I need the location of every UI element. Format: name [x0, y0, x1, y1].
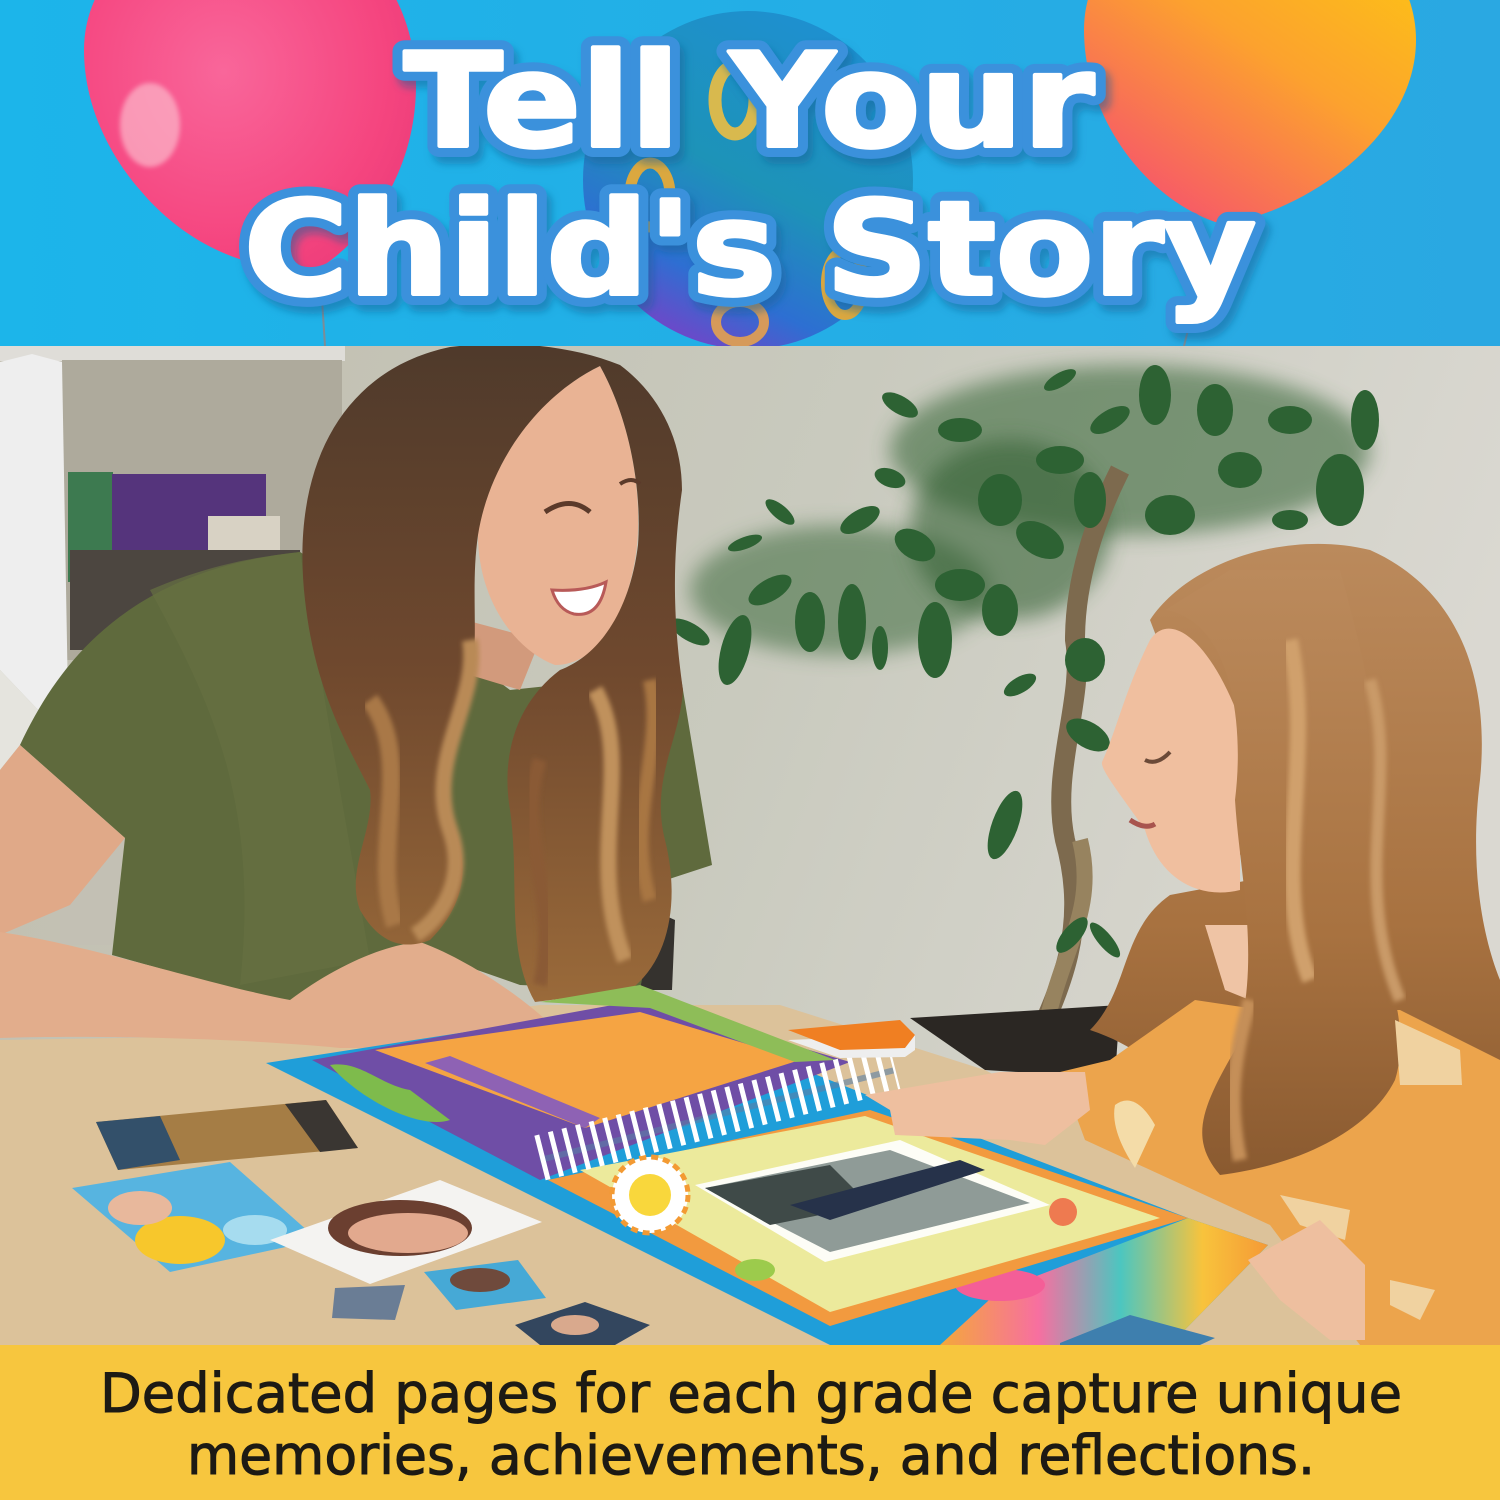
caption text [100, 1362, 1402, 1487]
title: Tell Your [404, 25, 1094, 177]
balloon: blue patterned [583, 11, 913, 349]
photo 1 [96, 1100, 358, 1170]
face [1102, 629, 1240, 892]
shelf [0, 346, 345, 770]
plant [666, 365, 1379, 1078]
small photos [332, 1260, 650, 1345]
woman [0, 344, 712, 1048]
icon: flower [1049, 1198, 1077, 1226]
title: Child's Story [244, 173, 1256, 325]
right page [548, 1110, 1188, 1326]
balloon: orange [1084, 0, 1416, 346]
caption text: Dedicated pages for each grade capture unique [100, 1362, 1402, 1425]
caption text: memories, achievements, and reflections. [187, 1424, 1315, 1487]
neck [1205, 925, 1345, 1005]
photo scene [0, 344, 1500, 1345]
left page [312, 1000, 850, 1180]
sunflower [612, 1157, 688, 1233]
icon: heart [735, 1259, 775, 1281]
hands [865, 1072, 1090, 1145]
hair front [1165, 570, 1400, 1175]
banner background with balloons [0, 0, 1500, 349]
tape dispenser [788, 1020, 915, 1058]
wall background [0, 346, 1500, 1345]
photo 3 [270, 1180, 542, 1284]
arm [0, 745, 125, 935]
neck [474, 622, 534, 690]
photo 2 [72, 1162, 318, 1272]
title: Child's Story [244, 173, 1256, 325]
smile [552, 582, 606, 614]
pens [1060, 1315, 1215, 1345]
sweater [1060, 1000, 1500, 1345]
balloon: pink [84, 0, 416, 346]
book [266, 985, 1268, 1345]
girl [865, 544, 1500, 1345]
table [0, 1005, 1360, 1345]
hair back [1090, 544, 1500, 1175]
chair shadow [640, 918, 675, 990]
caption bar [0, 1345, 1500, 1500]
shirt [20, 552, 712, 1005]
photo on page [695, 1140, 1050, 1262]
title: Tell Your [404, 25, 1094, 177]
hair highlights [415, 640, 471, 935]
title [244, 25, 1256, 325]
hair left and crown [302, 344, 683, 1002]
hearts on sweater [1395, 1020, 1462, 1085]
face [478, 366, 638, 665]
book cover [266, 1005, 1268, 1345]
loose photos [72, 1100, 650, 1345]
spiral binding [540, 1070, 895, 1160]
